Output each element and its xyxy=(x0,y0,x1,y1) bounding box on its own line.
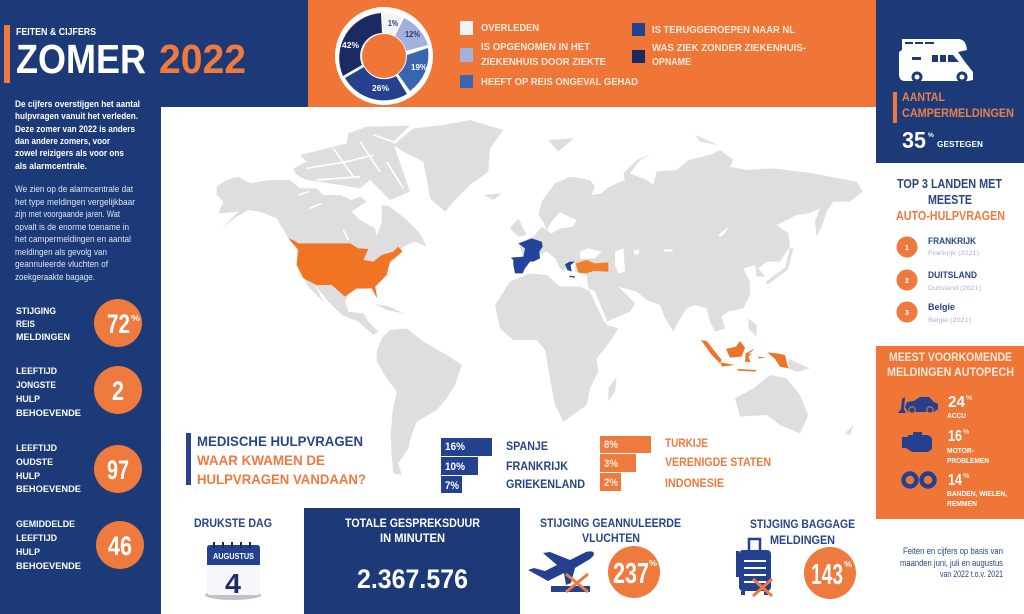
stat: accu: 24 xyxy=(948,394,965,411)
stat: leeftijd jongste: LEEFTIJD xyxy=(16,366,57,377)
bar chart: blue countries: SPANJE xyxy=(506,439,548,453)
stat: gemiddelde leeftijd: GEMIDDELDE xyxy=(16,519,75,530)
stat: banden: 14 xyxy=(948,472,962,489)
body text: meldingen als gevolg van xyxy=(15,247,107,258)
body text: We zien op de alarmcentrale dat xyxy=(15,184,133,195)
accent bar xyxy=(893,92,897,123)
stat: banden xyxy=(947,472,1007,508)
bar chart: blue countries: 16% xyxy=(445,441,465,453)
stat: stijging reis meldingen: % xyxy=(131,314,140,323)
title: 2022 xyxy=(159,36,246,82)
title xyxy=(16,36,246,82)
bar chart: orange countries: 3% xyxy=(604,458,618,470)
icon: cancelled plane xyxy=(528,551,594,592)
camper stat xyxy=(902,127,983,153)
heading: AUTO-HULPVRAGEN xyxy=(896,209,1005,223)
map: Americas xyxy=(217,120,503,475)
panel: totale gespreksduur: IN MINUTEN xyxy=(380,533,445,545)
bar chart: orange countries: 2% xyxy=(604,477,618,489)
heading xyxy=(887,350,1014,379)
body text: zoekgeraakte bagage. xyxy=(15,272,95,283)
circle: 237%: 237 xyxy=(613,558,649,590)
footnote: van 2022 t.o.v. 2021 xyxy=(940,569,1003,579)
bar chart: orange countries: 8% xyxy=(604,439,618,451)
intro text xyxy=(15,99,140,172)
stat: leeftijd oudste xyxy=(16,443,142,495)
panel: baggage meldingen: MELDINGEN xyxy=(770,535,835,547)
stat: banden: % xyxy=(963,473,970,480)
donut chart: 19% xyxy=(411,63,427,72)
stat: banden: REMMEN xyxy=(947,499,977,508)
panel: totale gespreksduur xyxy=(304,508,520,614)
panel: medische hulpvragen xyxy=(186,433,771,493)
intro text: Deze zomer van 2022 is anders xyxy=(15,124,135,135)
stat: gemiddelde leeftijd: 46 xyxy=(108,531,132,561)
bar chart: orange countries: INDONESIE xyxy=(665,476,724,490)
icon: engine xyxy=(902,432,932,452)
map: France xyxy=(518,238,543,262)
intro text: zowel reizigers als voor ons xyxy=(15,148,124,159)
circle: 237% xyxy=(608,546,660,598)
stat: leeftijd jongste: HULP xyxy=(16,394,41,405)
bar chart: orange countries xyxy=(600,436,771,491)
rank 2: DUITSLAND xyxy=(928,270,977,281)
camper stat: % xyxy=(928,132,934,139)
rank 3: Belgie (2021) xyxy=(928,317,971,324)
rank 3: Belgie xyxy=(928,302,955,313)
stat: motor: PROBLEMEN xyxy=(947,456,989,465)
panel: left sidebar xyxy=(0,0,308,614)
heading: HULPVRAGEN VANDAAN? xyxy=(197,471,366,487)
bar chart: blue countries xyxy=(441,438,585,493)
stat: motor xyxy=(947,428,989,465)
bar chart: orange countries: TURKIJE xyxy=(665,436,708,450)
stat: accu: % xyxy=(966,395,973,402)
panel: autopech xyxy=(876,346,1024,519)
footnote xyxy=(900,546,1004,579)
heading xyxy=(197,433,366,487)
map: Greece xyxy=(565,262,575,278)
bar chart: orange countries: VERENIGDE STATEN xyxy=(665,455,771,469)
stat: leeftijd oudste: 97 xyxy=(107,455,129,485)
stat: motor: MOTOR- xyxy=(947,446,974,455)
icon: calendar: 4 xyxy=(225,568,241,599)
rank 1: FRANKRIJK xyxy=(928,236,976,247)
map: Turkey xyxy=(576,260,608,273)
bar chart: blue countries: 10% xyxy=(445,461,465,473)
legend: IS OPGENOMEN IN HET xyxy=(481,41,591,53)
stat: gemiddelde leeftijd xyxy=(16,519,144,572)
heading: MEDISCHE HULPVRAGEN xyxy=(197,433,363,449)
legend: IS TERUGGEROEPEN NAAR NL xyxy=(652,24,796,36)
map: Spain xyxy=(511,257,530,273)
footnote: maanden juni, juli en augustus xyxy=(900,558,1004,568)
donut chart: 1% xyxy=(388,19,398,28)
icon: tires xyxy=(904,474,934,486)
icon: camper xyxy=(899,39,973,82)
intro text: De cijfers overstijgen het aantal xyxy=(15,99,140,110)
circle: 237%: % xyxy=(649,559,657,568)
intro text: hulpvragen vanuit het verleden. xyxy=(15,111,138,122)
legend: OPNAME xyxy=(652,56,691,68)
stat: motor: 16 xyxy=(948,428,962,445)
rank 3 xyxy=(896,302,971,324)
panel: drukste dag: DRUKSTE DAG xyxy=(194,518,272,530)
map: Indonesia xyxy=(701,340,788,372)
map: United States xyxy=(288,238,402,298)
panel: totale gespreksduur: TOTALE GESPREKSDUUR xyxy=(345,518,481,530)
stat: leeftijd jongste: BEHOEVENDE xyxy=(16,408,81,419)
camper stat: GESTEGEN xyxy=(937,139,983,149)
legend: WAS ZIEK ZONDER ZIEKENHUIS- xyxy=(652,42,806,54)
icon: calendar: AUGUSTUS xyxy=(213,552,255,561)
panel: top orange band xyxy=(308,0,876,107)
body text: geannuleerde vluchten of xyxy=(15,259,108,270)
total value: 2.367.576 xyxy=(357,564,468,594)
rank 1: 1 xyxy=(905,245,909,252)
heading: TOP 3 LANDEN MET xyxy=(897,177,1002,191)
stat: gemiddelde leeftijd: LEEFTIJD xyxy=(16,533,57,544)
rank 1 xyxy=(896,236,979,258)
stat: leeftijd jongste: JONGSTE xyxy=(16,380,56,391)
intro text: als alarmcentrale. xyxy=(15,161,87,172)
stat: stijging reis meldingen: 72 xyxy=(107,309,130,339)
panel: baggage meldingen xyxy=(736,519,856,599)
body text: het campermeldingen en aantal xyxy=(15,234,131,245)
stat: leeftijd jongste: 2 xyxy=(112,376,124,406)
stat: leeftijd oudste: BEHOEVENDE xyxy=(16,484,81,495)
circle: 143%: % xyxy=(844,560,852,569)
donut chart: 12% xyxy=(405,30,420,39)
rank 2 xyxy=(896,270,981,292)
stat: accu: ACCU xyxy=(947,411,966,420)
stat: stijging reis meldingen: REIS xyxy=(16,319,35,330)
stat: leeftijd oudste: LEEFTIJD xyxy=(16,443,57,454)
camper heading xyxy=(902,92,1014,120)
icon: cancelled suitcase xyxy=(736,539,772,596)
legend: OVERLEDEN xyxy=(481,22,539,34)
panel: geannuleerde vluchten: STIJGING GEANNULEERDE xyxy=(540,518,681,530)
rank 2: 2 xyxy=(905,278,909,285)
intro text: dan andere zomers, voor xyxy=(15,136,110,147)
footnote: Feiten en cijfers op basis van xyxy=(903,546,1003,556)
heading xyxy=(896,177,1005,223)
title: ZOMER xyxy=(16,36,146,82)
donut chart: 42% xyxy=(342,41,359,50)
accent bar xyxy=(4,25,10,83)
rank 2: Duitsland (2021) xyxy=(928,285,981,292)
heading: MEESTE xyxy=(928,193,972,207)
body text xyxy=(15,184,135,283)
legend xyxy=(460,21,806,88)
stat: stijging reis meldingen: STIJGING xyxy=(16,306,56,317)
camper heading: CAMPERMELDINGEN xyxy=(902,108,1014,120)
panel: camper xyxy=(876,0,1024,163)
stat: motor: % xyxy=(963,429,970,436)
bar chart: blue countries: GRIEKENLAND xyxy=(506,477,585,491)
panel: drukste dag xyxy=(194,518,272,600)
stat: gemiddelde leeftijd: HULP xyxy=(16,547,41,558)
stat: stijging reis meldingen xyxy=(16,299,142,347)
camper stat: 35 xyxy=(902,127,926,153)
bar chart: blue countries: FRANKRIJK xyxy=(506,459,568,473)
bar chart: blue countries: 7% xyxy=(445,480,459,492)
body text: zijn met voorgaande jaren. Wat xyxy=(15,209,120,220)
accent bar xyxy=(186,433,191,485)
rank 1: Frankrijk (2021) xyxy=(928,250,979,257)
icon: car xyxy=(898,397,938,413)
body text: opvalt is de enorme toename in xyxy=(15,222,129,233)
world map xyxy=(217,120,863,475)
stat: stijging reis meldingen: MELDINGEN xyxy=(16,332,70,343)
panel: baggage meldingen: STIJGING BAGGAGE xyxy=(750,519,855,531)
legend: HEEFT OP REIS ONGEVAL GEHAD xyxy=(481,76,638,88)
camper heading: AANTAL xyxy=(902,92,945,104)
circle: 143%: 143 xyxy=(811,559,843,591)
donut chart: 26% xyxy=(372,84,389,93)
heading: WAAR KWAMEN DE xyxy=(197,452,325,468)
stat: leeftijd oudste: HULP xyxy=(16,471,41,482)
stat: leeftijd oudste: OUDSTE xyxy=(16,457,53,468)
stat: accu xyxy=(947,394,973,420)
legend: ZIEKENHUIS DOOR ZIEKTE xyxy=(481,56,606,68)
panel: geannuleerde vluchten: VLUCHTEN xyxy=(582,533,640,545)
stat: banden: BANDEN, WIELEN, xyxy=(947,489,1007,498)
eyebrow: FEITEN & CIJFERS xyxy=(16,27,96,38)
rank 3: 3 xyxy=(905,310,909,317)
circle: 143% xyxy=(804,547,856,599)
map: Eurasia, Africa, Oceania xyxy=(495,135,863,435)
panel: geannuleerde vluchten xyxy=(528,518,681,598)
stat: leeftijd jongste xyxy=(16,366,142,419)
body text: het type meldingen vergelijkbaar xyxy=(15,197,135,208)
icon: calendar xyxy=(205,542,261,600)
donut chart xyxy=(335,7,433,105)
stat: gemiddelde leeftijd: BEHOEVENDE xyxy=(16,561,81,572)
panel: top 3 landen xyxy=(896,177,1005,324)
